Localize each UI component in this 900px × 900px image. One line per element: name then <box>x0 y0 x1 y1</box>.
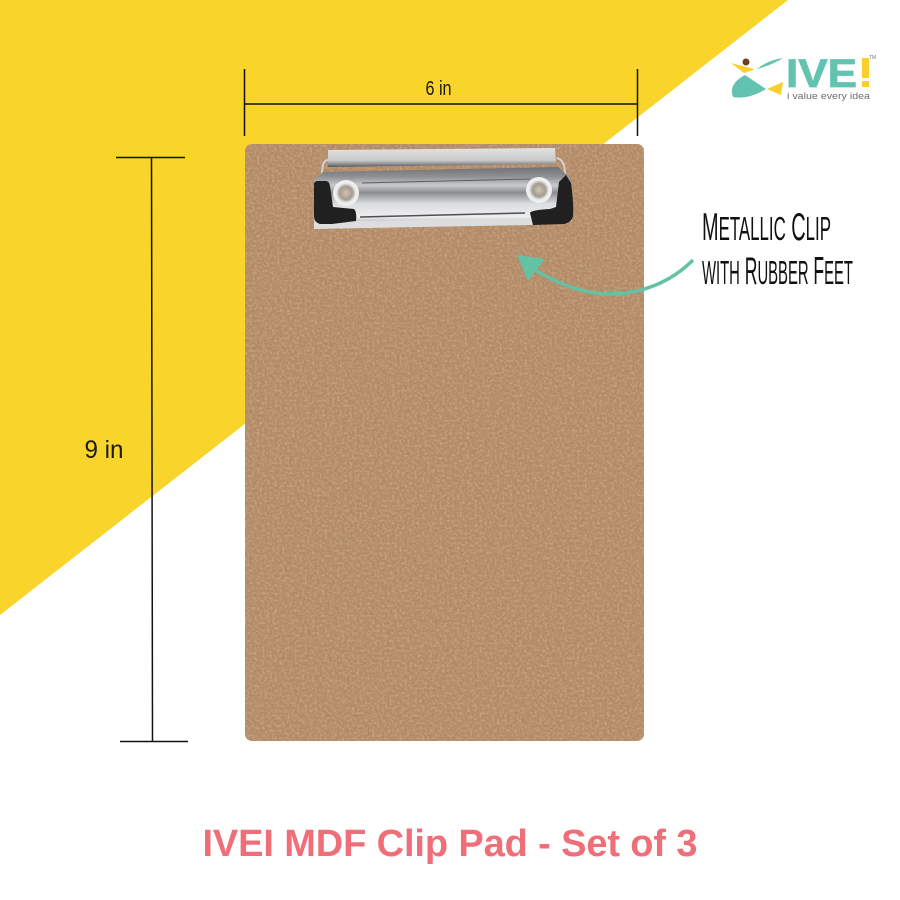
width dimension <box>244 69 638 136</box>
yellow diagonal background <box>0 0 788 615</box>
clip lower lip <box>314 217 572 229</box>
clip callout text <box>702 206 853 293</box>
right rubber foot <box>530 175 573 225</box>
callout arrow <box>517 255 693 294</box>
left rubber foot <box>314 181 356 224</box>
clip plate <box>314 167 572 228</box>
clipboard board <box>245 144 644 741</box>
logo <box>731 52 876 101</box>
logo figure teal body <box>732 75 766 98</box>
logo wordmark: IVE <box>786 52 857 96</box>
logo trademark: TM <box>869 55 876 61</box>
logo figure leg <box>767 82 783 95</box>
height label: 9 in <box>84 436 124 464</box>
clip top bar <box>328 148 556 167</box>
right rivet <box>526 177 552 203</box>
logo figure teal stroke <box>757 58 783 69</box>
clip callout text: METALLIC CLIP <box>702 206 831 249</box>
clip wire loops <box>322 158 565 174</box>
logo exclamation <box>862 58 869 87</box>
logo figure head <box>742 58 750 66</box>
clip callout text: WITH RUBBER FEET <box>702 250 853 293</box>
logo tagline: i value every idea <box>787 91 870 101</box>
width label: 6 in <box>426 78 452 100</box>
title: IVEI MDF Clip Pad - Set of 3 <box>202 823 698 865</box>
height dimension <box>84 157 188 742</box>
metallic clip <box>314 148 573 229</box>
left rivet <box>333 180 359 206</box>
logo figure arm <box>731 63 754 73</box>
